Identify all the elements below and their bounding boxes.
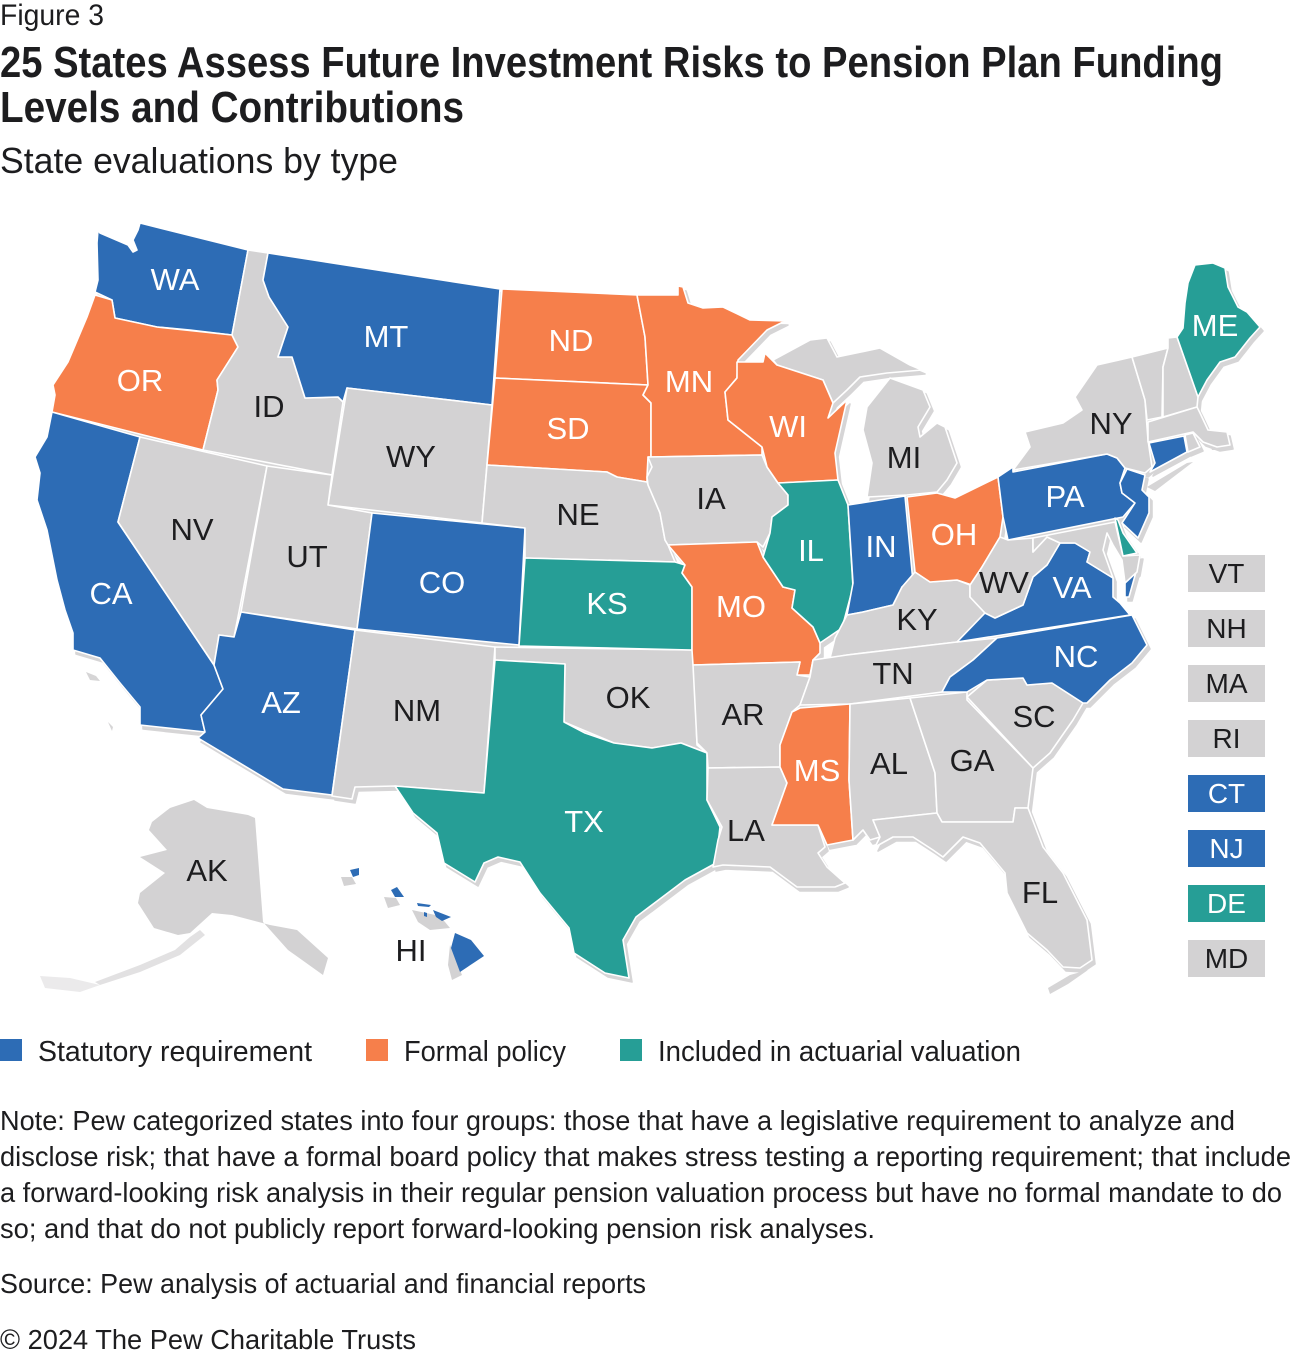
note xyxy=(0,1105,1291,1244)
state: New York: NY xyxy=(1089,406,1133,441)
state: Illinois: IL xyxy=(798,533,824,568)
state: Missouri: MO xyxy=(716,589,766,624)
state: Iowa: IA xyxy=(696,481,726,516)
coastal shadow islands xyxy=(86,432,1232,994)
state: Maryland xyxy=(1033,522,1140,583)
Hawaii island shadows xyxy=(341,877,462,980)
state: North Dakota: ND xyxy=(549,323,593,358)
state: Arkansas xyxy=(693,662,810,768)
box: Maryland: MD xyxy=(1205,943,1248,974)
state: Wyoming xyxy=(328,388,492,523)
state: Wisconsin: WI xyxy=(769,409,807,444)
state: South Dakota: SD xyxy=(546,411,590,446)
state: Florida: FL xyxy=(1022,875,1058,910)
title: Levels and Contributions xyxy=(0,83,464,132)
state: North Carolina xyxy=(942,615,1147,703)
legend: formal policy: Formal policy xyxy=(404,1036,566,1068)
state: West Virginia xyxy=(970,537,1060,618)
state: Pennsylvania xyxy=(998,454,1135,540)
state: Tennessee: TN xyxy=(872,656,914,691)
state: Utah: UT xyxy=(286,539,328,574)
box: Rhode Island xyxy=(1188,720,1265,757)
note: a forward-looking risk analysis in their regular pension valuation process but have no formal mandate to do xyxy=(0,1177,1282,1208)
legend xyxy=(0,1036,1021,1068)
state: Nebraska: NE xyxy=(556,497,600,532)
state: Idaho xyxy=(203,250,343,475)
state: Wisconsin xyxy=(725,353,847,483)
state: South Carolina xyxy=(967,678,1083,768)
state: Virginia: VA xyxy=(1052,570,1092,605)
state: Connecticut xyxy=(1149,436,1187,472)
legend: included in actuarial valuation: Included in actuarial valuation xyxy=(658,1036,1021,1068)
state: Alaska: AK xyxy=(186,853,228,888)
state: Louisiana xyxy=(707,767,845,887)
state: New Mexico xyxy=(332,630,495,799)
state: South Carolina: SC xyxy=(1012,699,1056,734)
subtitle: State evaluations by type xyxy=(0,140,398,181)
state: Vermont xyxy=(1132,348,1168,420)
state: Pennsylvania: PA xyxy=(1045,479,1085,514)
state: Iowa xyxy=(647,455,788,547)
state: Ohio: OH xyxy=(931,517,977,552)
state: Kentucky xyxy=(830,572,985,658)
state: Louisiana: LA xyxy=(727,813,765,848)
state: West Virginia: WV xyxy=(979,565,1029,600)
state: Washington: WA xyxy=(151,262,200,297)
state: Georgia: GA xyxy=(950,743,995,778)
Hawaii label: HI xyxy=(396,933,426,968)
source: Source: Pew analysis of actuarial and financial reports xyxy=(0,1268,646,1299)
state: Indiana: IN xyxy=(866,529,896,564)
map of the United States xyxy=(35,223,1260,994)
state: Florida xyxy=(873,808,1092,968)
box: Vermont: VT xyxy=(1209,558,1244,589)
state: Utah xyxy=(241,466,372,629)
state: Arkansas: AR xyxy=(721,697,765,732)
state: Oregon: OR xyxy=(117,363,163,398)
state: North Carolina: NC xyxy=(1054,639,1098,674)
state: Virginia eastern shore xyxy=(1125,570,1136,597)
state: California xyxy=(35,412,223,732)
state: Hawaii xyxy=(341,868,484,980)
state: Ohio xyxy=(907,477,1003,585)
state: Oklahoma: OK xyxy=(606,680,651,715)
box: Vermont xyxy=(1188,555,1265,592)
state: North Dakota xyxy=(495,289,648,385)
state: Minnesota: MN xyxy=(665,364,713,399)
note: so; and that do not publicly report forward-looking pension risk analyses. xyxy=(0,1213,875,1244)
state: Idaho: ID xyxy=(254,389,284,424)
state: Oregon xyxy=(52,295,238,450)
state: Mississippi: MS xyxy=(794,753,840,788)
box: Massachusetts: MA xyxy=(1206,668,1248,699)
box: Connecticut: CT xyxy=(1208,778,1245,809)
state: Georgia xyxy=(910,692,1033,822)
state: Mississippi xyxy=(772,704,853,845)
state: Montana: MT xyxy=(364,319,408,354)
state: California: CA xyxy=(89,576,133,611)
state: Alabama xyxy=(849,698,937,840)
state: New York xyxy=(1013,357,1152,473)
note: disclose risk; that have a formal board policy that makes stress testing a reporting requirement; that include xyxy=(0,1141,1291,1172)
state: Texas: TX xyxy=(564,804,604,839)
title xyxy=(0,38,1223,132)
box: New Jersey: NJ xyxy=(1209,833,1244,864)
box: Delaware: DE xyxy=(1207,888,1246,919)
state: Nebraska xyxy=(482,465,675,562)
state: Nevada xyxy=(118,437,267,665)
state: Washington xyxy=(95,223,248,335)
state: Missouri xyxy=(668,542,820,675)
state: South Dakota xyxy=(487,378,651,482)
state: Wyoming: WY xyxy=(386,439,436,474)
state: Oklahoma xyxy=(495,647,707,753)
state: Rhode Island xyxy=(1185,433,1200,452)
state: Virginia xyxy=(957,543,1130,642)
state: Alabama: AL xyxy=(870,746,908,781)
small state boxes xyxy=(1188,555,1265,977)
state: Indiana xyxy=(847,496,913,615)
state: New Mexico: NM xyxy=(393,693,441,728)
Hawaii islands xyxy=(350,868,484,972)
state: New Hampshire xyxy=(1163,337,1198,417)
box: Delaware xyxy=(1188,885,1265,922)
state: Tennessee xyxy=(800,638,997,705)
box: Rhode Island: RI xyxy=(1212,723,1240,754)
note: Note: Pew categorized states into four groups: those that have a legislative requirement to analyze and xyxy=(0,1105,1235,1136)
state: Montana xyxy=(263,253,500,405)
state: Nevada: NV xyxy=(170,512,214,547)
state: Kansas: KS xyxy=(586,586,628,621)
state: Michigan upper peninsula xyxy=(773,338,922,403)
state: Alaska xyxy=(40,800,328,992)
state: Arizona: AZ xyxy=(261,685,301,720)
box: New Hampshire xyxy=(1188,610,1265,647)
state: Texas xyxy=(395,660,720,978)
box: New Jersey xyxy=(1188,830,1265,867)
state: Minnesota xyxy=(637,286,785,457)
box: Massachusetts xyxy=(1188,665,1265,702)
state: Kentucky: KY xyxy=(896,602,938,637)
state: Arizona xyxy=(198,612,355,795)
state: Colorado xyxy=(357,513,525,645)
state: Massachusetts xyxy=(1148,407,1230,447)
legend: statutory requirement: Statutory requirement xyxy=(38,1036,312,1068)
state: Illinois xyxy=(763,480,853,643)
state: Colorado: CO xyxy=(419,565,465,600)
state: Maine: ME xyxy=(1192,308,1238,343)
state: Michigan lower peninsula xyxy=(863,378,957,497)
box: New Hampshire: NH xyxy=(1206,613,1247,644)
box: Maryland xyxy=(1188,940,1265,977)
state: Michigan lower peninsula: MI xyxy=(887,440,921,475)
copyright: © 2024 The Pew Charitable Trusts xyxy=(0,1324,416,1355)
state: Maine xyxy=(1177,263,1260,397)
box: Connecticut xyxy=(1188,775,1265,812)
state: New Jersey xyxy=(1120,469,1149,538)
state: Kansas xyxy=(519,558,692,650)
contiguous states xyxy=(35,223,1260,978)
state: Delaware xyxy=(1115,518,1137,556)
